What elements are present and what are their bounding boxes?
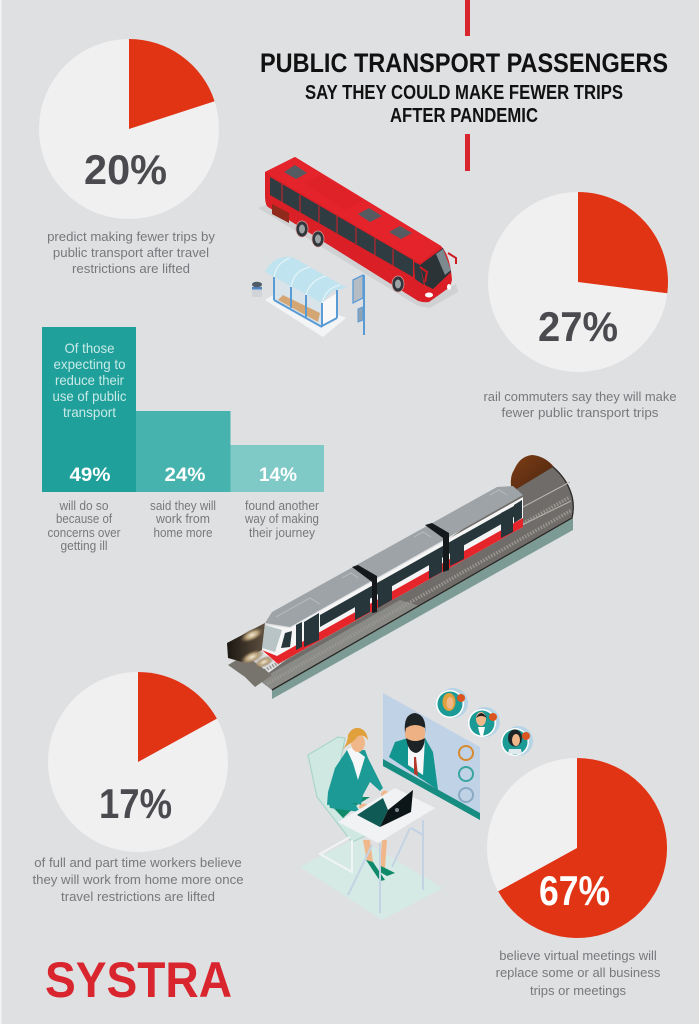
train roof (265, 486, 523, 627)
bar caption: 49% (48, 498, 121, 553)
video screen (383, 693, 480, 820)
shelter back glass (274, 277, 322, 327)
illustration: bus stop (252, 257, 364, 337)
bar caption: 14%: found another (245, 498, 320, 513)
illustration: bus (258, 157, 458, 308)
track stub and headlight glow (228, 655, 272, 687)
track bed (259, 467, 573, 690)
caption: 67%: trips or meetings (530, 983, 627, 998)
bar: 24%: 24% (164, 465, 206, 486)
logo: SYSTRA: SYSTRA (45, 952, 232, 1008)
pie chart: 20% (39, 39, 219, 219)
articulation joints (352, 565, 377, 613)
train red stripe (262, 518, 523, 664)
shelter canopy (265, 257, 347, 303)
presenter (389, 713, 438, 790)
bar: 14%: 14% (259, 465, 297, 486)
bar caption: 24%: said they will (150, 498, 216, 513)
skirt (333, 797, 370, 818)
caption: 67%: believe virtual meetings will (499, 948, 657, 963)
pie chart: 67% (487, 758, 667, 938)
jacket (327, 750, 383, 805)
legs and shoes (363, 840, 373, 862)
bar: 49%: 49% (70, 465, 111, 486)
train front window (281, 631, 292, 648)
laptop (357, 790, 413, 827)
bus windows (270, 177, 413, 277)
caption: 27% (484, 389, 676, 420)
bar: 49%: use of public (52, 388, 126, 404)
bar caption: 14%: way of making (244, 511, 319, 526)
bus body (265, 157, 452, 302)
bar: 49%: expecting to (54, 356, 126, 372)
caption: 17%: travel restrictions are lifted (61, 889, 215, 904)
bench (278, 295, 320, 322)
title line 3: AFTER PANDEMIC (390, 105, 538, 127)
head and hair (351, 734, 365, 752)
bar: 49%: transport (63, 404, 116, 420)
caption: 20%: public transport after travel (53, 245, 209, 260)
caption: 27%: rail commuters say they will make (484, 389, 676, 404)
train side (262, 497, 523, 664)
tunnel opening (511, 455, 560, 496)
pie chart: 20%: 20% (84, 146, 167, 193)
illustration: train (227, 455, 573, 699)
wheels (296, 221, 308, 237)
shirt (347, 747, 365, 780)
pie chart: 27%: 27% (538, 303, 618, 350)
avatar: woman with dark hair (501, 726, 533, 756)
bar caption: 24%: work from (155, 511, 210, 526)
bar caption: 49%: because of (56, 511, 112, 526)
caption: 20%: predict making fewer trips by (47, 229, 215, 244)
caption: 17% (32, 855, 244, 904)
headlights (425, 292, 433, 298)
screen gauges (459, 746, 473, 802)
caption: 20% (47, 229, 215, 276)
bar: 49%: Of those (64, 340, 115, 356)
lower arm and hands (328, 800, 360, 812)
bar caption: 49%: will do so (59, 498, 108, 513)
person at desk (327, 728, 395, 881)
bar caption: 14%: their journey (249, 525, 315, 540)
windshield (420, 248, 451, 289)
avatar: man (468, 707, 500, 737)
bar caption: 14% (244, 498, 320, 540)
pie chart: 67%: 67% (539, 867, 610, 914)
pie chart: 17%: 17% (99, 780, 172, 827)
pie chart: 17% (48, 672, 228, 852)
train windows (320, 502, 521, 627)
title block (260, 48, 668, 127)
bin (252, 283, 262, 297)
sign post (363, 275, 365, 335)
bus roof (265, 157, 441, 263)
caption: 17%: of full and part time workers believe (34, 855, 242, 870)
bar caption: 24%: home more (154, 525, 212, 540)
caption: 20%: restrictions are lifted (72, 261, 190, 276)
bar caption: 49%: concerns over (48, 525, 121, 540)
title line 2: SAY THEY COULD MAKE FEWER TRIPS (305, 82, 623, 104)
bar caption: 24% (150, 498, 216, 540)
caption: 17%: they will work from home more once (32, 872, 244, 887)
bar chart: reasons (42, 327, 324, 492)
caption: 67% (496, 948, 661, 998)
caption: 67%: replace some or all business (496, 965, 661, 980)
caption: 27%: fewer public transport trips (502, 405, 659, 420)
illustration: video call (300, 688, 533, 920)
avatar: woman (436, 688, 468, 718)
chair (308, 737, 365, 872)
bar: 49% (42, 327, 136, 492)
track base side (272, 518, 573, 699)
bar caption: 49%: getting ill (60, 538, 108, 553)
bar: 49%: reduce their (55, 372, 124, 388)
bar: 24% (136, 411, 230, 492)
floor mat (300, 837, 443, 920)
desk (338, 788, 435, 913)
pie chart: 27% (488, 192, 668, 372)
bar: 14% (230, 445, 324, 492)
mirrors (448, 253, 456, 264)
